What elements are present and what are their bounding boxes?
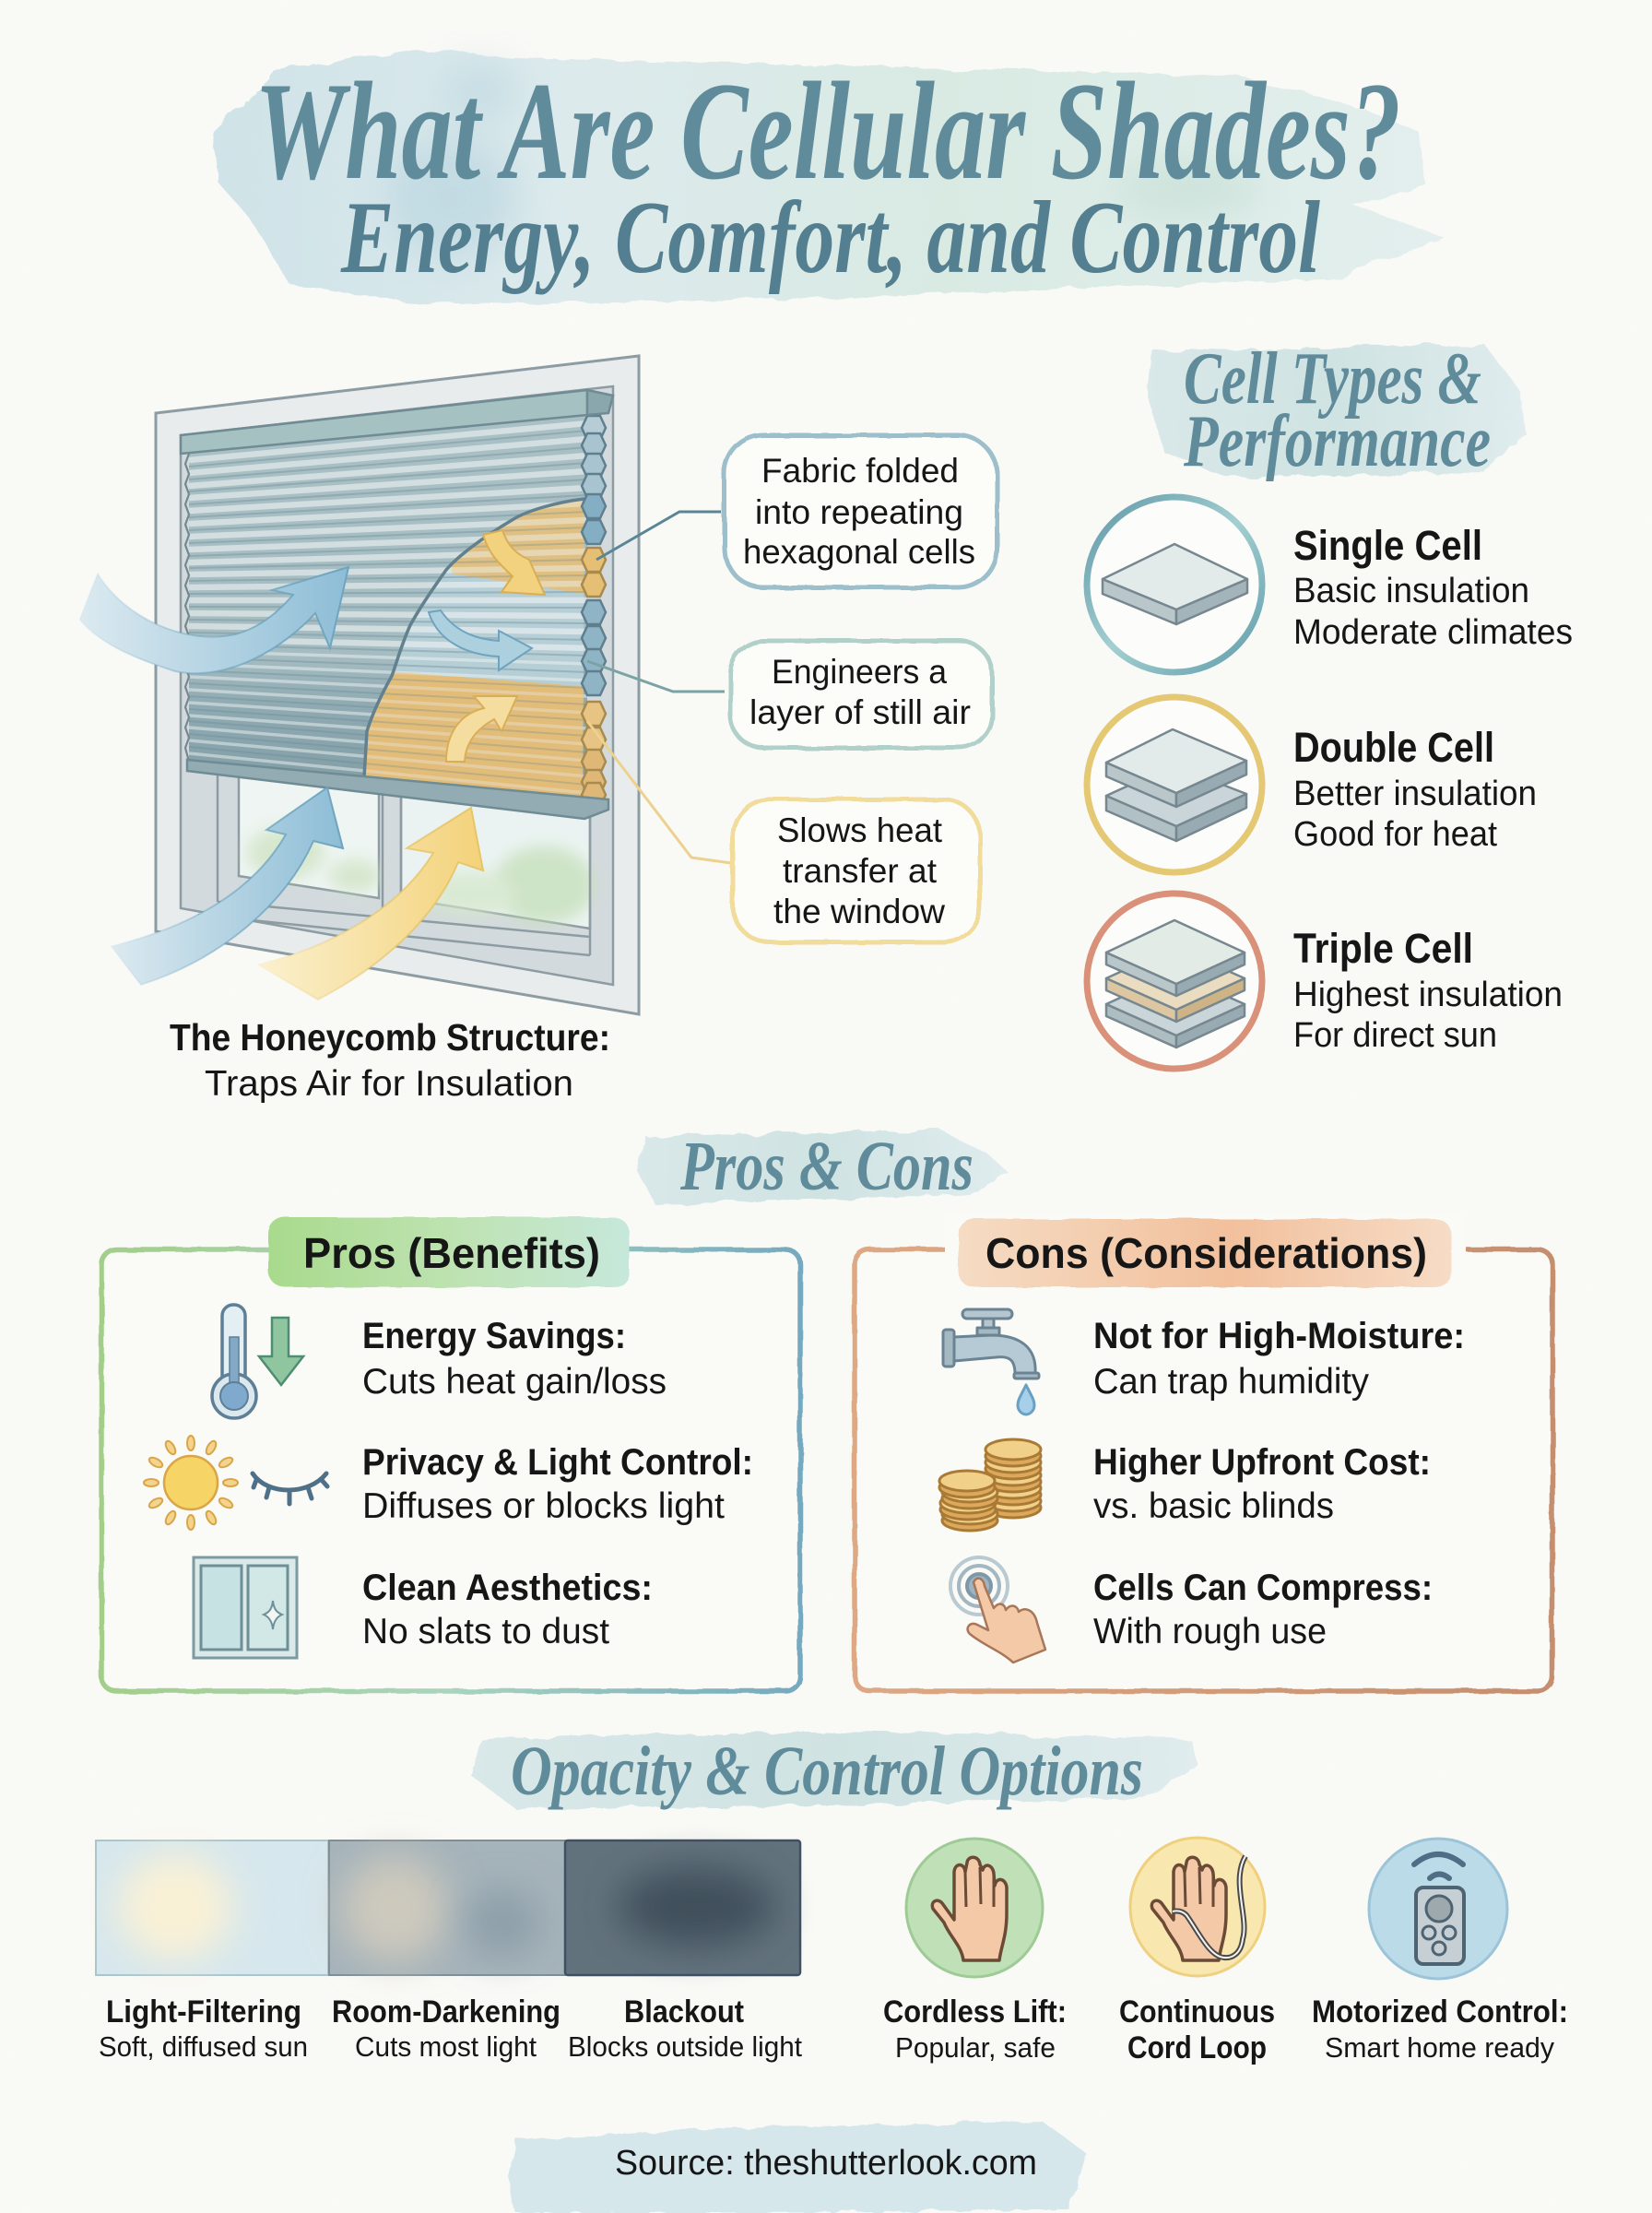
text: privacy and light control: Diffuses or blocks light xyxy=(362,1486,725,1526)
shade left pleats xyxy=(185,454,189,762)
title xyxy=(213,49,1444,304)
caption: honeycomb structure: The Honeycomb Structure: xyxy=(170,1016,610,1059)
callout: heat transfer xyxy=(587,721,980,942)
swatch: light-filtering: Soft, diffused sun xyxy=(99,2030,308,2063)
control: continuous cord loop: Continuous xyxy=(1119,1994,1275,2030)
outer frame xyxy=(156,356,639,1014)
cell type: single xyxy=(1087,497,1573,672)
text: not for high moisture: Can trap humidity xyxy=(1093,1362,1369,1402)
text: higher upfront cost xyxy=(1093,1442,1431,1526)
heading: opacity and control: Opacity & Control Options xyxy=(511,1733,1143,1810)
trees outside xyxy=(247,827,595,924)
callout: hexagonal cells: Fabric folded xyxy=(761,452,959,490)
single cell text: Basic insulation xyxy=(1293,572,1529,610)
swatch: room-darkening xyxy=(329,1840,565,2063)
swatch: light-filtering xyxy=(96,1840,328,2063)
footer source: Source: theshutterlook.com xyxy=(615,2144,1037,2183)
footer source xyxy=(508,2121,1086,2213)
text: energy savings: Cuts heat gain/loss xyxy=(362,1362,667,1402)
cell type: double xyxy=(1087,697,1537,872)
heading: pros and cons: Pros & Cons xyxy=(679,1128,974,1205)
cutaway torn edge xyxy=(364,499,584,777)
control: cordless lift xyxy=(883,1839,1067,2064)
opacity swatches xyxy=(96,1840,802,2063)
callout: heat transfer: Slows heat xyxy=(777,811,943,849)
control: motorized xyxy=(1312,1839,1568,2064)
text: clean aesthetics: No slats to dust xyxy=(362,1612,609,1651)
swatch: blackout: Blocks outside light xyxy=(568,2030,802,2063)
pros border xyxy=(101,1249,800,1691)
window illustration xyxy=(79,356,639,1014)
control: motorized: Motorized Control: xyxy=(1312,1994,1568,2030)
callout: still air xyxy=(587,641,992,748)
ring xyxy=(1087,893,1262,1069)
swatch: light-filtering: Light-Filtering xyxy=(106,1994,301,2030)
double cell text xyxy=(1293,724,1537,854)
arrow: yellow heat xyxy=(257,808,483,1000)
swatch: room-darkening: Room-Darkening xyxy=(332,1994,560,2030)
cutaway interior xyxy=(365,501,584,796)
text: higher upfront cost: vs. basic blinds xyxy=(1093,1486,1334,1526)
text: energy savings: Energy Savings: xyxy=(362,1316,626,1356)
icon: sun and closed eye xyxy=(144,1436,327,1530)
window opening xyxy=(181,386,613,985)
double plate icon xyxy=(1106,729,1246,841)
swatch: room-darkening: Cuts most light xyxy=(355,2030,537,2063)
bottom rail xyxy=(187,760,608,819)
heading: cell types xyxy=(1148,338,1526,482)
control: continuous cord loop xyxy=(1119,1838,1275,2065)
caption: honeycomb structure xyxy=(170,1016,610,1104)
cons pill heading: Cons (Considerations) xyxy=(985,1229,1427,1277)
left glass pane xyxy=(239,773,379,898)
heading: cell types: Cell Types & xyxy=(1184,338,1481,420)
triple cell text xyxy=(1293,925,1563,1055)
callout: heat transfer: the window xyxy=(773,893,945,930)
swatch: blackout: Blackout xyxy=(624,1994,744,2030)
arrow: blue outside air xyxy=(79,567,348,673)
text: cells can compress: With rough use xyxy=(1093,1612,1327,1651)
control options xyxy=(883,1838,1568,2065)
text: not for high moisture: Not for High-Moisture: xyxy=(1093,1316,1465,1356)
triple cell text: Triple Cell xyxy=(1293,925,1473,972)
callout: hexagonal cells: into repeating xyxy=(755,493,963,531)
single cell text: Single Cell xyxy=(1293,522,1482,569)
control: continuous cord loop: Cord Loop xyxy=(1127,2030,1267,2065)
cons pill heading xyxy=(945,1215,1466,1289)
hexagonal cells column xyxy=(582,416,606,807)
control: cordless lift: Popular, safe xyxy=(895,2031,1056,2064)
text: clean aesthetics: Clean Aesthetics: xyxy=(362,1568,653,1608)
arrow: small yellow down xyxy=(483,530,545,595)
swatch: blackout xyxy=(565,1840,802,2063)
arrow: small yellow up xyxy=(446,696,517,762)
double cell text: Double Cell xyxy=(1293,724,1494,771)
icon: coin stacks xyxy=(939,1439,1041,1531)
callout: still air: layer of still air xyxy=(749,693,971,731)
title wash blobs xyxy=(387,65,1263,258)
double cell text: Better insulation xyxy=(1293,775,1537,813)
ring xyxy=(1087,497,1262,672)
triple cell text: Highest insulation xyxy=(1293,976,1563,1014)
control: cordless lift: Cordless Lift: xyxy=(883,1994,1067,2030)
text: clean aesthetics xyxy=(362,1568,653,1651)
icon: dripping faucet xyxy=(943,1309,1039,1414)
triple plate icon xyxy=(1106,920,1245,1047)
callout: heat transfer: transfer at xyxy=(783,852,938,890)
panel: cons xyxy=(855,1215,1552,1691)
arrow: small blue still air xyxy=(429,610,532,670)
single cell text: Moderate climates xyxy=(1293,613,1573,652)
title line 2: Energy, Comfort, and Control xyxy=(340,181,1320,295)
title watercolor banner xyxy=(213,49,1444,304)
cellular shade xyxy=(189,415,587,802)
icon: clean window xyxy=(194,1557,297,1658)
arrow: blue rising air xyxy=(111,787,343,985)
triple cell text: For direct sun xyxy=(1293,1016,1497,1055)
head rail xyxy=(181,390,587,454)
heading: cell types: Performance xyxy=(1183,401,1491,482)
shade slats xyxy=(189,423,587,793)
callout: hexagonal cells: hexagonal cells xyxy=(743,533,975,571)
cons border xyxy=(855,1249,1552,1691)
text: energy savings xyxy=(362,1316,667,1402)
callout: still air: Engineers a xyxy=(772,653,947,691)
text: cells can compress xyxy=(1093,1568,1433,1651)
control: motorized: Smart home ready xyxy=(1325,2031,1554,2064)
single plate icon xyxy=(1103,544,1247,624)
head rail cap xyxy=(587,390,613,415)
double cell text: Good for heat xyxy=(1293,815,1497,854)
right glass pane xyxy=(401,795,590,929)
single cell text xyxy=(1293,522,1573,652)
icon: pressing finger xyxy=(950,1557,1045,1663)
panel: pros xyxy=(101,1217,800,1691)
callout: hexagonal cells xyxy=(596,435,997,587)
pros pill heading xyxy=(268,1217,630,1287)
pros pill heading: Pros (Benefits) xyxy=(303,1229,600,1277)
text: higher upfront cost: Higher Upfront Cost: xyxy=(1093,1442,1431,1483)
ring xyxy=(1087,697,1262,872)
text: privacy and light control xyxy=(362,1442,753,1526)
text: cells can compress: Cells Can Compress: xyxy=(1093,1568,1433,1608)
cell type: triple xyxy=(1087,893,1563,1069)
caption: honeycomb structure: Traps Air for Insulation xyxy=(205,1064,573,1104)
icon: thermometer with down arrow xyxy=(212,1305,303,1418)
sash lines xyxy=(198,771,590,955)
text: not for high moisture xyxy=(1093,1316,1465,1402)
text: privacy and light control: Privacy & Light Control: xyxy=(362,1442,753,1483)
